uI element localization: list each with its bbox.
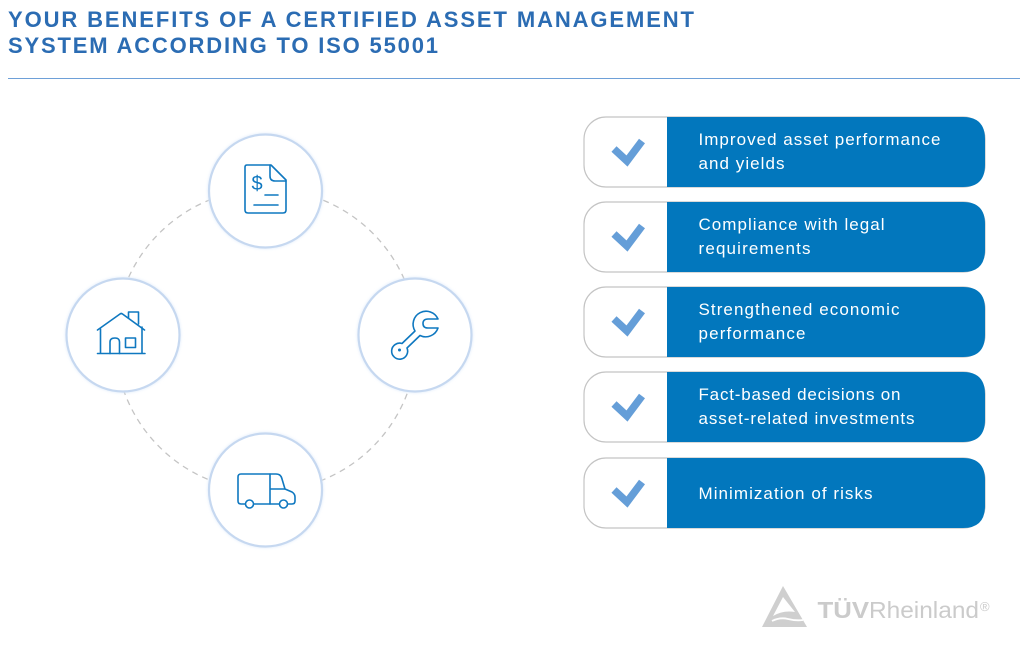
icon circle: delivery van <box>208 432 323 548</box>
benefit 5: Minimization of risks <box>698 484 872 503</box>
benefit 2: requirements <box>698 239 810 258</box>
icon circle: house <box>66 278 180 392</box>
icon circle: wrench <box>358 278 472 392</box>
benefit 2 <box>584 202 985 272</box>
logo: TÜV Rheinland: TÜV <box>818 597 870 623</box>
benefit 2: Compliance with legal <box>698 215 884 234</box>
benefit 1: and yields <box>698 154 784 173</box>
benefit 3: performance <box>698 324 806 343</box>
logo triangle <box>762 586 807 627</box>
title: YOUR BENEFITS OF A CERTIFIED ASSET MANAGEMENT <box>8 7 695 32</box>
check mark <box>614 311 642 331</box>
benefit 3: Strengthened economic <box>698 300 900 319</box>
check mark <box>614 396 642 416</box>
check mark <box>614 141 642 161</box>
logo: TÜV Rheinland: ® <box>980 599 990 614</box>
title: SYSTEM ACCORDING TO ISO 55001 <box>8 33 438 58</box>
benefit 4 <box>584 372 985 442</box>
dashed ring connecting the icons <box>115 189 417 491</box>
check mark <box>614 226 642 246</box>
logo: TÜV Rheinland: Rheinland <box>869 597 979 623</box>
benefit 4: asset-related investments <box>698 409 914 428</box>
icon circle: document with dollar sign: $ <box>251 173 263 195</box>
logo: TÜV Rheinland <box>762 586 990 627</box>
icon circle: document with dollar sign <box>208 134 323 248</box>
benefit 1: Improved asset performance <box>698 130 940 149</box>
benefit 4: Fact-based decisions on <box>698 385 900 404</box>
benefit 5 <box>584 458 985 528</box>
check mark <box>614 482 642 502</box>
title <box>8 7 695 58</box>
benefit 1 <box>584 117 985 187</box>
benefit 3 <box>584 287 985 357</box>
